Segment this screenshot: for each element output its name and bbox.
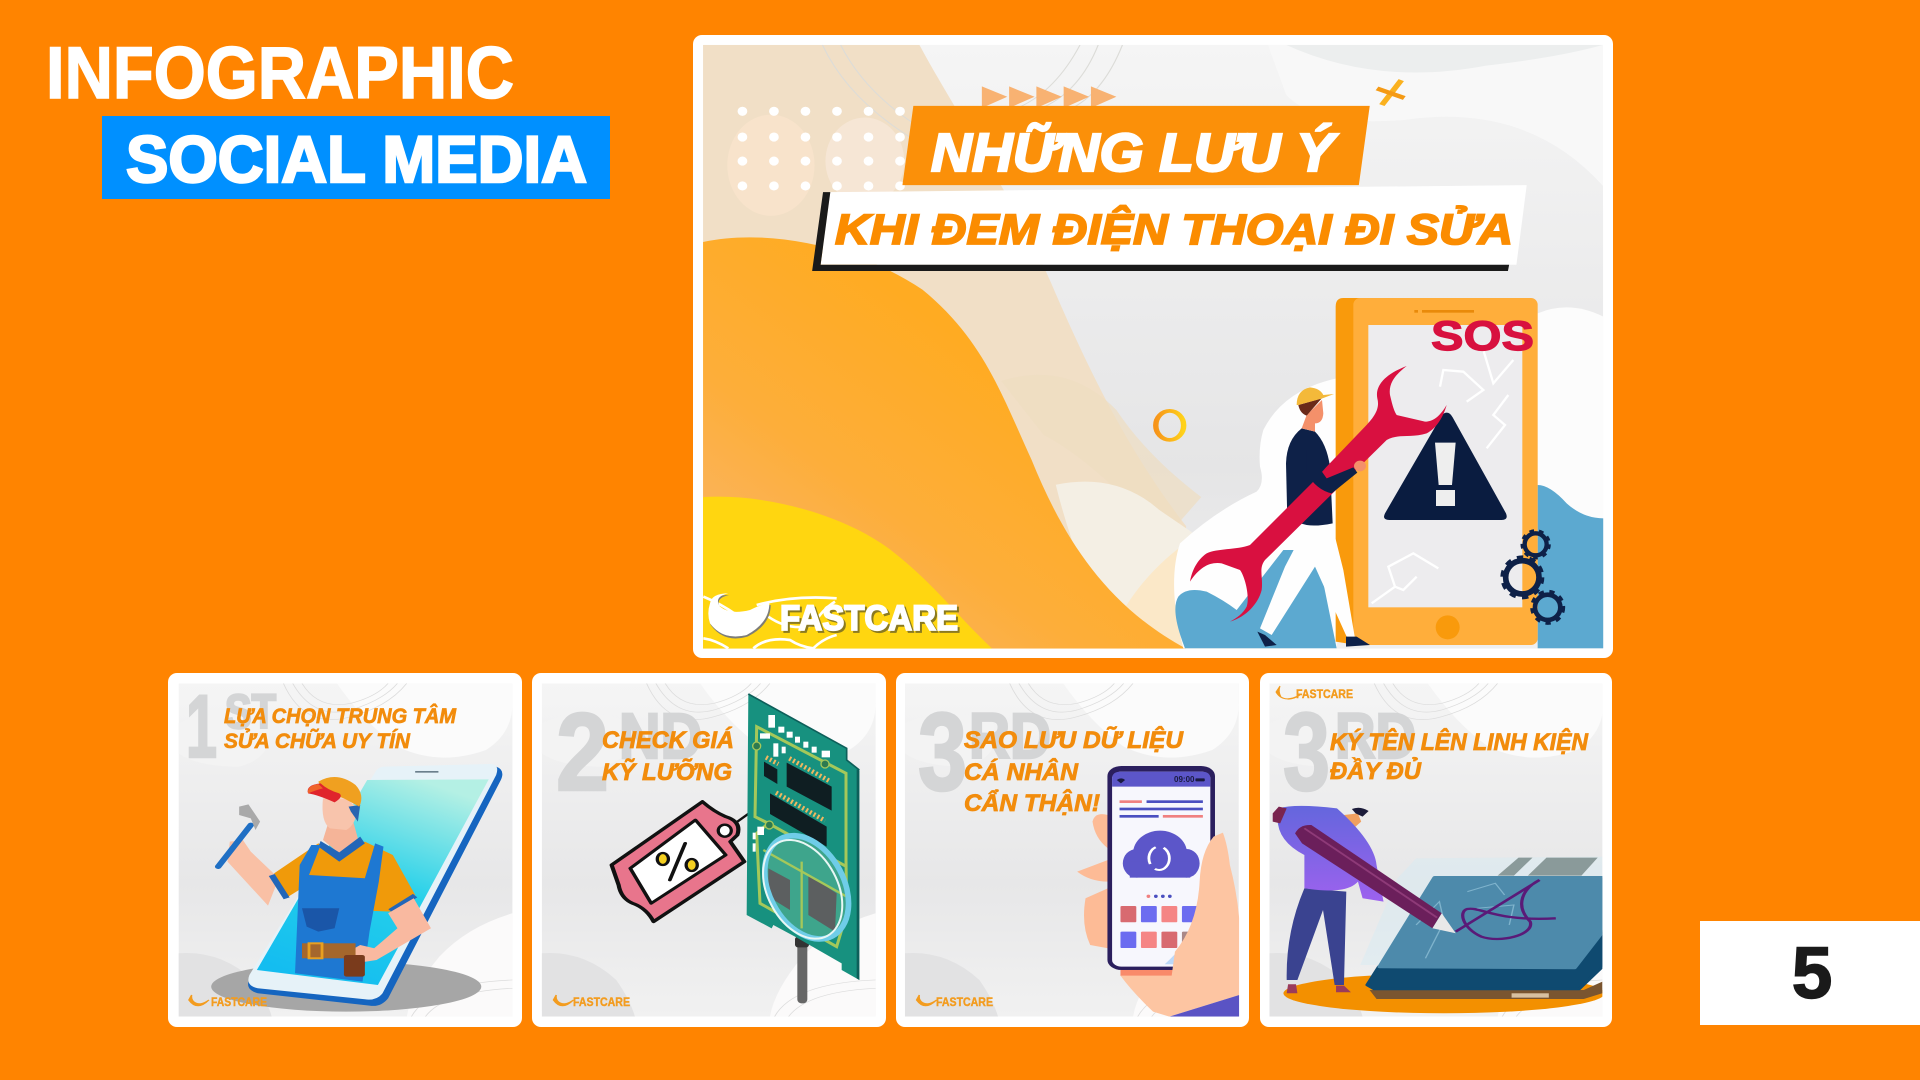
watermark: 3rd: RD	[1335, 700, 1416, 772]
watermark: 3rd: 3	[918, 691, 967, 814]
heading: card 3	[964, 726, 1184, 817]
heading: card 1	[224, 704, 456, 753]
watermark: 2nd: ND	[619, 700, 702, 772]
logo: fastcare small: FASTCARE	[936, 995, 993, 1009]
heading: card 1: LỰA CHỌN TRUNG TÂM	[224, 704, 456, 728]
panel: card 2	[532, 673, 886, 1027]
page number box: 5	[1792, 933, 1832, 1014]
heading: nhung luu y: NHỮNG LƯU Ý	[931, 123, 1339, 183]
logo: fastcare small: FASTCARE	[211, 995, 267, 1009]
heading: khi dem dien thoai di sua: KHI ĐEM ĐIỆN THOẠI ĐI SỬA	[835, 205, 1513, 254]
heading: card 2: KỸ LƯỠNG	[602, 758, 732, 786]
panel: card 1	[168, 673, 522, 1027]
icon: fastcare swoosh	[1276, 686, 1300, 699]
subtitle badge: social media: SOCIAL MEDIA	[126, 122, 587, 196]
title: infographic: INFOGRAPHIC	[46, 33, 514, 114]
page number box	[1700, 921, 1920, 1025]
label: sos: SOS	[1431, 312, 1534, 359]
watermark: 1st	[186, 676, 276, 776]
illustration: circuit board with magnifier	[746, 694, 865, 1003]
watermark: 1st: ST	[225, 686, 276, 739]
phone status clock: 09:00	[1174, 775, 1195, 784]
logo mark: fastcare swoosh and waves	[703, 593, 837, 648]
heading: card 3: CÁ NHÂN	[964, 758, 1079, 786]
watermark: 2nd: 2	[556, 691, 609, 814]
heading: card 4: ĐẦY ĐỦ	[1330, 757, 1422, 785]
watermark: 3rd: RD	[969, 700, 1051, 772]
heading: card 1: SỬA CHỮA UY TÍN	[224, 729, 411, 753]
heading: card 2	[602, 726, 734, 786]
logo: fastcare small: FASTCARE	[1296, 687, 1353, 701]
heading: card 4	[1330, 728, 1589, 785]
logo: fastcare small: FASTCARE	[573, 995, 630, 1009]
watermark: 2nd	[556, 691, 702, 814]
panel: card 3	[896, 673, 1249, 1027]
heading: card 4: KÝ TÊN LÊN LINH KIỆN	[1330, 728, 1589, 756]
heading: card 3: SAO LƯU DỮ LIỆU	[964, 726, 1184, 754]
panel: card 4	[1260, 673, 1612, 1027]
panel: main poster	[693, 35, 1613, 658]
watermark: 3rd	[1283, 691, 1416, 814]
illustration: repairman with wrench and broken phone	[1174, 298, 1603, 648]
logo: fastcare: FASTCARE	[782, 601, 960, 640]
heading: card 3: CẨN THẬN!	[964, 789, 1100, 817]
watermark: 3rd: 3	[1283, 691, 1330, 814]
watermark: 1st: 1	[186, 676, 217, 776]
heading: card 2: CHECK GIÁ	[602, 726, 734, 754]
logo: fastcare: FASTCARE	[780, 599, 958, 638]
watermark: 3rd	[918, 691, 1051, 814]
